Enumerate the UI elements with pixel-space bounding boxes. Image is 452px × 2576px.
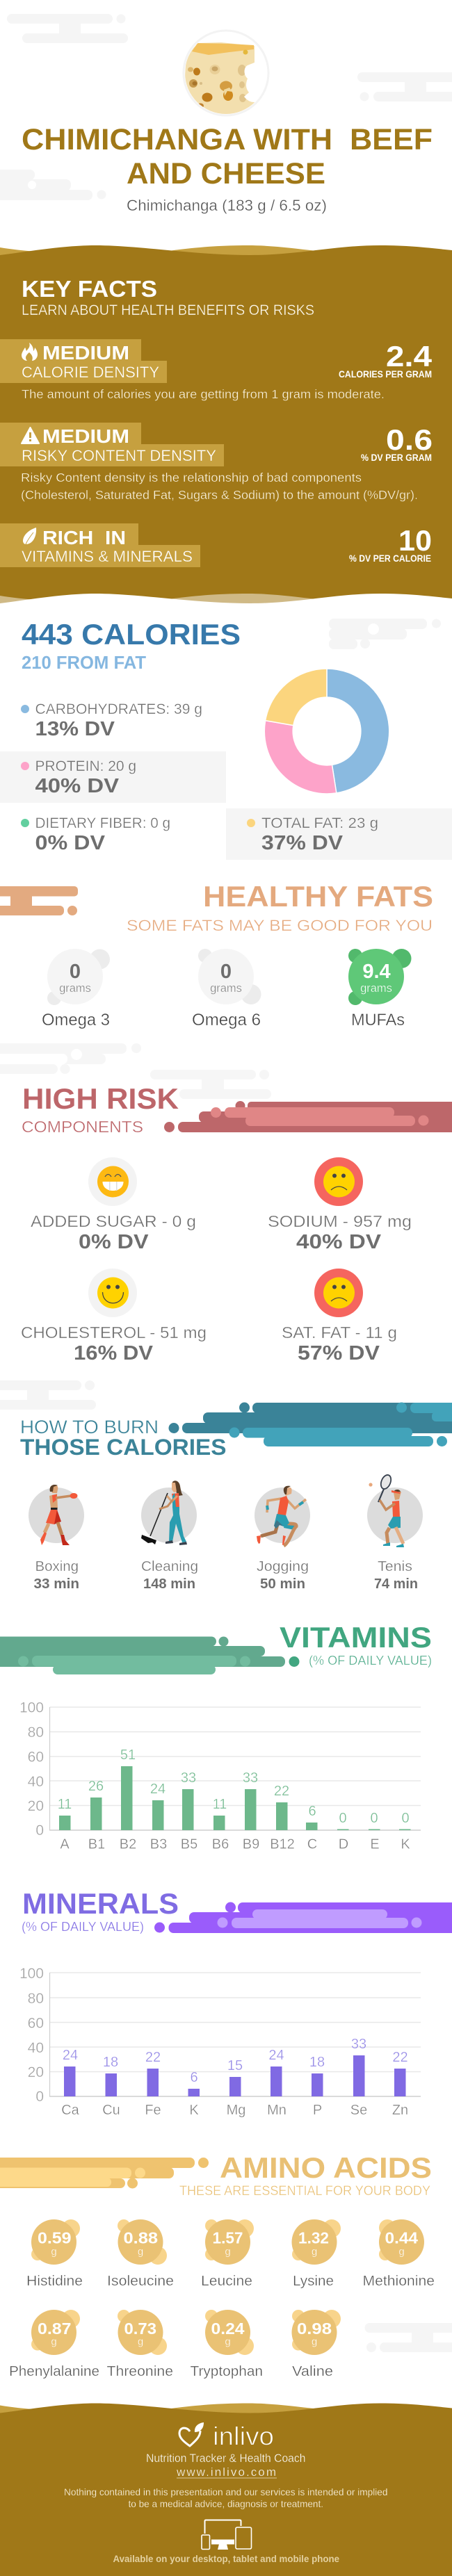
exercise: jogging: 50 min [260,1576,305,1592]
amino: tryptophan [191,2310,263,2379]
stat: omega 3: Omega 3 [42,1011,110,1029]
bar chart: vitamins: C [307,1836,317,1852]
icon: cleaning woman [141,1481,187,1545]
bar chart: minerals: Mg [227,2103,245,2118]
bar chart: vitamins: 60 [28,1749,44,1766]
banner blob: teal [168,1403,452,1446]
amino: methionine: 0.44 [385,2228,418,2247]
bar chart: vitamins: B1 [88,1836,105,1852]
exercise: boxing: 33 min [33,1576,79,1592]
amino: lysine: 1.32 [298,2228,329,2247]
wave footer [0,2404,452,2419]
bar chart: minerals: 60 [28,2016,44,2031]
exercise: boxing: Boxing [35,1559,79,1574]
disclaimer: Nothing contained in this presentation and our services is intended or implied [64,2486,388,2497]
bar chart: minerals: Se [350,2103,367,2118]
bar chart: vitamins: 100 [19,1700,44,1715]
bar chart: minerals: Mn [267,2103,286,2118]
amino: tryptophan: g [225,2336,231,2348]
panel: how to burn [20,1403,452,1592]
amino: phenylalanine: g [51,2336,57,2348]
risk: cholesterol [21,1269,207,1364]
stat: omega 6: grams [210,982,242,995]
banner blob: green [0,1636,299,1674]
subheading: LEARN ABOUT HEALTH BENEFITS OR RISKS [22,302,314,318]
exercise: tennis [367,1474,423,1592]
legend: total fat: 37% DV [261,832,344,854]
bar chart: minerals: 18 [309,2055,325,2070]
decorative cloud: before burn [0,1380,96,1410]
stat: omega 6: Omega 6 [192,1011,261,1029]
risk: saturated fat [282,1269,397,1364]
bar chart: vitamins: 33 [243,1770,258,1786]
bar chart: vitamins: 40 [28,1774,44,1790]
bar chart: minerals: 24 [63,2048,78,2063]
amino: lysine [292,2219,341,2289]
bar chart: vitamins: B6 [212,1836,229,1852]
subheading: (% OF DAILY VALUE) [309,1653,432,1668]
amino: tryptophan: Tryptophan [191,2364,263,2379]
amino: threonine: g [138,2336,143,2348]
bar chart: vitamins: 0 [339,1811,347,1826]
fact: rich in vitamins and minerals: RICH IN [42,527,126,548]
amino: lysine: Lysine [293,2274,334,2289]
fact: calorie density: MEDIUM [42,342,129,364]
legend: carbohydrates [21,701,202,740]
exercise: cleaning: 148 min [143,1576,195,1592]
fact: calorie density: 2.4 [386,340,433,373]
risk: added sugar: 0% DV [79,1231,149,1253]
legend: protein [0,751,226,803]
decorative cloud: header left [7,14,128,43]
title: AND CHEESE [127,157,325,190]
decorative cloud: header lower left [0,170,106,200]
bar chart: minerals: 20 [28,2064,44,2080]
subheading: components: COMPONENTS [22,1118,143,1136]
risk: saturated fat: SAT. FAT - 11 g [282,1323,397,1342]
stat: omega 6 [192,949,261,1029]
bar chart: vitamins: B12 [270,1836,295,1852]
exercise: jogging: Jogging [257,1559,309,1574]
banner blob: orange [0,886,78,915]
bar chart: vitamins: K [401,1836,410,1852]
heading: those calories: THOSE CALORIES [20,1435,227,1460]
bar chart: vitamins: B2 [120,1836,136,1852]
panel: key facts [0,245,452,610]
bar chart: minerals: Zn [392,2103,408,2118]
bar chart: minerals: P [313,2103,322,2118]
amino: phenylalanine: Phenylalanine [9,2364,99,2379]
exercise: tennis: Tenis [378,1559,412,1574]
decorative cloud: header right [357,72,452,101]
bar chart: minerals: Fe [145,2103,161,2118]
panel: amino acids [0,2151,435,2379]
bar chart: vitamins: E [370,1836,380,1852]
icon: grinning face [97,1166,129,1197]
fact: risky content density: RISKY CONTENT DENSITY [22,447,216,464]
panel: footer [0,2404,452,2576]
risk: sodium: SODIUM - 957 mg [268,1212,412,1230]
legend: dietary fiber: DIETARY FIBER: 0 g [35,815,170,831]
bar chart: minerals: 22 [145,2050,161,2065]
bar chart: minerals: 15 [227,2058,243,2073]
heading: how to burn: HOW TO BURN [20,1417,159,1437]
amino: valine: 0.98 [297,2320,332,2338]
bar chart: vitamins: B9 [243,1836,259,1852]
fact: risky content density: Risky Content density is the relationship of bad components [21,471,362,484]
amino: threonine: 0.73 [124,2320,156,2338]
fact: risky content density: % DV PER GRAM [361,453,432,463]
bar chart: vitamins: 6 [308,1804,316,1819]
bar chart: vitamins: 51 [120,1747,136,1763]
stat: omega 6: 0 [220,961,232,983]
bar chart: minerals: 24 [268,2048,284,2063]
heading: high risk: HIGH RISK [22,1082,179,1115]
bar chart: vitamins: 33 [181,1770,196,1786]
bar chart: vitamins: 0 [401,1811,410,1826]
bar chart: minerals: 6 [190,2070,198,2085]
bar chart: minerals: Ca [61,2103,80,2118]
amino: isoleucine: 0.88 [124,2228,158,2247]
bar chart: vitamins: 11 [58,1797,72,1812]
stat: mufas: grams [360,982,392,995]
bar chart: minerals: 18 [103,2055,118,2070]
logo text: inlivo [213,2422,274,2451]
amino: methionine: g [398,2246,405,2258]
icon: warning triangle [22,427,39,443]
bar chart: vitamins: 20 [28,1798,44,1814]
legend: total fat [226,808,452,860]
bar chart: vitamins: 0 [35,1823,44,1839]
amino: leucine: g [225,2246,231,2258]
bar chart: minerals: 22 [392,2050,408,2065]
fact: risky content density: 0.6 [386,423,433,456]
amino: histidine: Histidine [26,2274,83,2289]
bar chart: minerals [19,1966,421,2118]
bar chart: minerals: 100 [19,1966,44,1982]
wave top [0,245,452,259]
icon: tennis player [369,1474,404,1547]
legend: protein: PROTEIN: 20 g [35,758,136,774]
serving subtitle: Chimichanga (183 g / 6.5 oz) [127,197,327,214]
legend: carbohydrates: CARBOHYDRATES: 39 g [35,701,202,717]
decorative cloud: calories [329,619,441,649]
risk: sodium: 40% DV [296,1231,382,1253]
disclaimer: to be a medical advice, diagnosis or treatment. [128,2498,323,2509]
panel: calories [0,618,452,860]
website: www.inlivo.com [176,2465,276,2479]
title: CHIMICHANGA WITH BEEF [22,123,433,156]
bar chart: vitamins: 26 [88,1779,104,1794]
fact: rich in vitamins and minerals: VITAMINS & MINERALS [22,548,193,565]
bar chart: minerals: Cu [102,2103,120,2118]
fact: calorie density: CALORIES PER GRAM [339,369,432,380]
fact: calorie density [0,339,433,401]
fact: calorie density: The amount of calories you are getting from 1 gram is moderate. [22,387,385,401]
title [22,123,433,190]
bar chart: vitamins: 22 [274,1784,289,1799]
bar chart: vitamins: A [60,1836,70,1852]
amino: histidine [26,2219,83,2289]
amino: phenylalanine: 0.87 [38,2320,71,2338]
bar chart: minerals: K [189,2103,199,2118]
exercise: cleaning: Cleaning [141,1559,198,1574]
icon: flame [22,343,38,361]
bar chart: vitamins: B5 [181,1836,197,1852]
amino: leucine: 1.57 [213,2228,243,2247]
icon: jogger [257,1486,306,1546]
disclaimer [64,2486,388,2509]
bar chart: vitamins: 24 [150,1782,166,1797]
food image: cheese in circle [182,31,268,118]
donut chart [264,669,389,794]
stat: mufas: MUFAs [351,1011,405,1029]
amino: leucine: Leucine [201,2274,252,2289]
amino: valine: Valine [292,2364,333,2379]
stat: omega 3 [42,949,110,1029]
availability note: Available on your desktop, tablet and mobile phone [113,2553,339,2564]
amino: threonine: Threonine [107,2364,173,2379]
legend: dietary fiber [21,815,170,854]
icon: smiling face [97,1278,129,1308]
fact: rich in vitamins and minerals [0,523,432,567]
icon: sad face [323,1278,355,1308]
amino: lysine: g [312,2246,317,2258]
subheading: THESE ARE ESSENTIAL FOR YOUR BODY [179,2183,430,2199]
subheading: (% OF DAILY VALUE) [22,1919,144,1934]
bar chart: vitamins: 80 [28,1725,44,1741]
fact: risky content density: (Cholesterol, Saturated Fat, Sugars & Sodium) to the amount (%DV/gr). [21,488,418,502]
bar chart: minerals: 33 [351,2037,366,2052]
amino: methionine: Methionine [363,2274,435,2289]
icon: devices [202,2520,252,2550]
amino: methionine [363,2219,435,2289]
legend: total fat: TOTAL FAT: 23 g [261,815,378,831]
fact: calorie density: CALORIE DENSITY [22,364,159,381]
decorative cloud: amino right [364,2323,452,2352]
exercise: tennis: 74 min [374,1576,418,1592]
risk: sodium [268,1157,412,1253]
heading: key facts: KEY FACTS [22,277,157,302]
bar chart: vitamins: D [339,1836,348,1852]
bar chart: minerals: 0 [35,2089,44,2105]
stat: omega 3: grams [59,982,91,995]
amino: phenylalanine [9,2310,99,2379]
fact: risky content density: MEDIUM [42,425,129,447]
risk: added sugar: ADDED SUGAR - 0 g [31,1212,196,1230]
heading: healthy fats: HEALTHY FATS [203,880,433,913]
icon: sad face [323,1166,355,1197]
icon: boxer [40,1485,78,1545]
bar chart: vitamins: 0 [370,1811,378,1826]
amino: valine: g [312,2336,317,2348]
risk: added sugar [31,1157,196,1253]
bar chart: vitamins [19,1700,421,1852]
fact: rich in vitamins and minerals: 10 [398,524,432,557]
risk: cholesterol: 16% DV [74,1342,154,1364]
banner blob: purple [154,1902,452,1933]
stat: mufas [348,949,412,1029]
bar chart: vitamins: B3 [150,1836,167,1852]
amino: histidine: 0.59 [38,2228,71,2247]
legend: dietary fiber: 0% DV [35,832,106,854]
subheading: from fat: 210 FROM FAT [22,653,146,673]
logo: heart and leaf [179,2422,204,2446]
amino: tryptophan: 0.24 [211,2320,245,2338]
exercise: jogging [255,1486,310,1592]
exercise: cleaning [141,1481,198,1592]
risk: saturated fat: 57% DV [298,1342,380,1364]
panel: healthy fats [0,880,433,1029]
heading: calories: 443 CALORIES [22,618,241,651]
stat: mufas: 9.4 [362,961,391,983]
stat: omega 3: 0 [70,961,81,983]
bar chart: minerals: 80 [28,1991,44,2007]
tagline: Nutrition Tracker & Health Coach [146,2452,306,2465]
panel: high risk [21,1082,452,1364]
heading: vitamins: VITAMINS [280,1621,432,1654]
panel: minerals [19,1887,452,2118]
panel: vitamins [0,1621,432,1852]
exercise: boxing [29,1485,84,1592]
decorative cloud: before high risk [0,1043,271,1099]
legend: carbohydrates: 13% DV [35,718,115,740]
bar chart: minerals: 40 [28,2040,44,2056]
banner blob: yellow [0,2158,209,2188]
fact: risky content density [0,423,433,502]
heading: amino acids: AMINO ACIDS [220,2151,432,2184]
amino: histidine: g [51,2246,57,2258]
subheading: SOME FATS MAY BE GOOD FOR YOU [127,917,433,934]
amino: isoleucine [107,2219,174,2289]
amino: threonine [107,2310,173,2379]
icon: leaf [23,528,36,544]
amino: valine [292,2310,341,2379]
wave bottom [0,594,452,610]
banner blob: red [164,1101,452,1132]
risk: cholesterol: CHOLESTEROL - 51 mg [21,1323,207,1342]
fact: rich in vitamins and minerals: % DV PER CALORIE [349,553,431,564]
legend: protein: 40% DV [35,775,120,797]
bar chart: vitamins: 11 [213,1797,227,1812]
heading: minerals: MINERALS [22,1887,179,1920]
amino: isoleucine: Isoleucine [107,2274,174,2289]
amino: leucine [201,2219,254,2289]
amino: isoleucine: g [138,2246,143,2258]
